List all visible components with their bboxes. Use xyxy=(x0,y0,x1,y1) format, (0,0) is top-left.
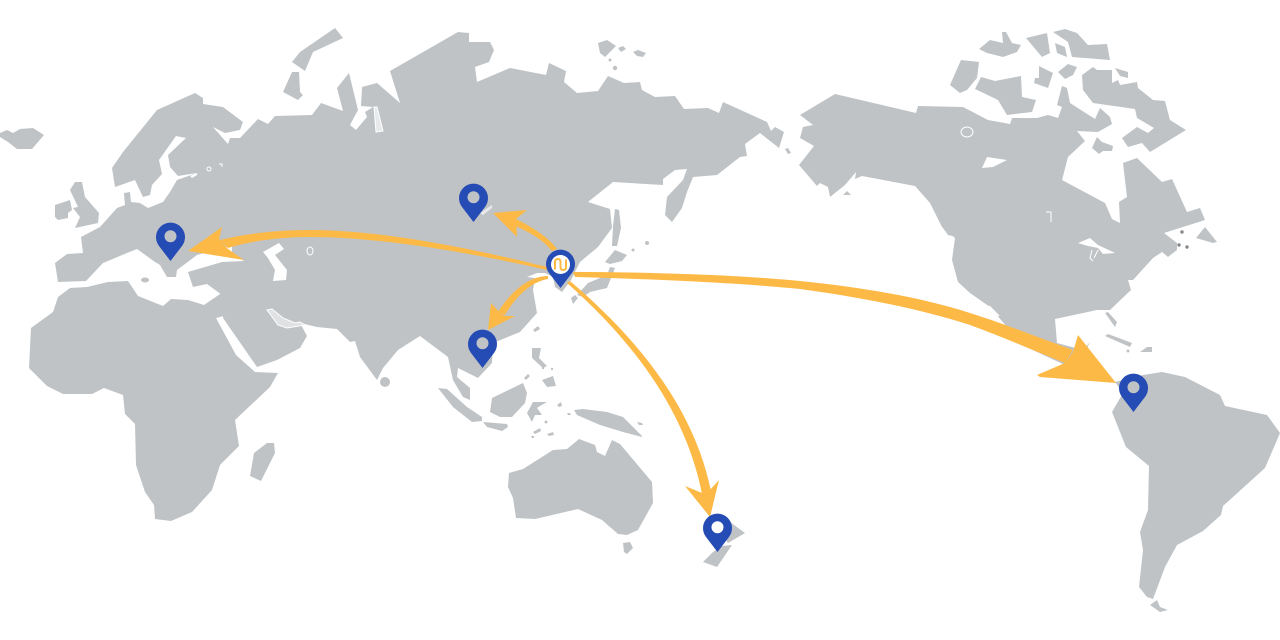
land: Southeast Asia islands xyxy=(438,326,643,438)
land: New Zealand xyxy=(703,522,745,567)
land: Japan and Sakhalin islands xyxy=(571,209,649,304)
pin: origin with logo xyxy=(546,250,575,288)
pin: New Zealand xyxy=(703,514,732,552)
land: Australia and Tasmania xyxy=(508,439,653,554)
land: South America xyxy=(1112,372,1280,612)
land: North American lakes xyxy=(961,127,1115,316)
land: North America xyxy=(799,86,1205,380)
land: Africa and Asia islands xyxy=(250,377,390,481)
arrow: route to Mongolia xyxy=(493,210,557,251)
land: Caribbean and Gulf of St Lawrence islands xyxy=(1105,230,1189,352)
pin: Colombia xyxy=(1119,374,1148,412)
land: New Guinea xyxy=(574,409,642,437)
land: inland seas and lakes of Eurasia xyxy=(190,107,492,328)
land: Arctic islands of Canada xyxy=(843,29,1217,243)
pin: Mongolia xyxy=(459,184,488,222)
arrow: route to Europe xyxy=(188,227,547,270)
land: Novaya Zemlya and Siberian islands xyxy=(283,28,791,154)
pin: Europe xyxy=(156,223,185,261)
land: Africa xyxy=(29,281,278,521)
arrow: route to Southeast Asia xyxy=(488,276,548,330)
land: British Isles, Iceland and Mediterranean islands xyxy=(0,128,149,282)
arrow: route to Colombia xyxy=(573,272,1116,383)
arrow: route to New Zealand xyxy=(567,281,719,517)
land: Eurasia xyxy=(55,32,784,400)
pin: Southeast Asia xyxy=(468,330,497,368)
